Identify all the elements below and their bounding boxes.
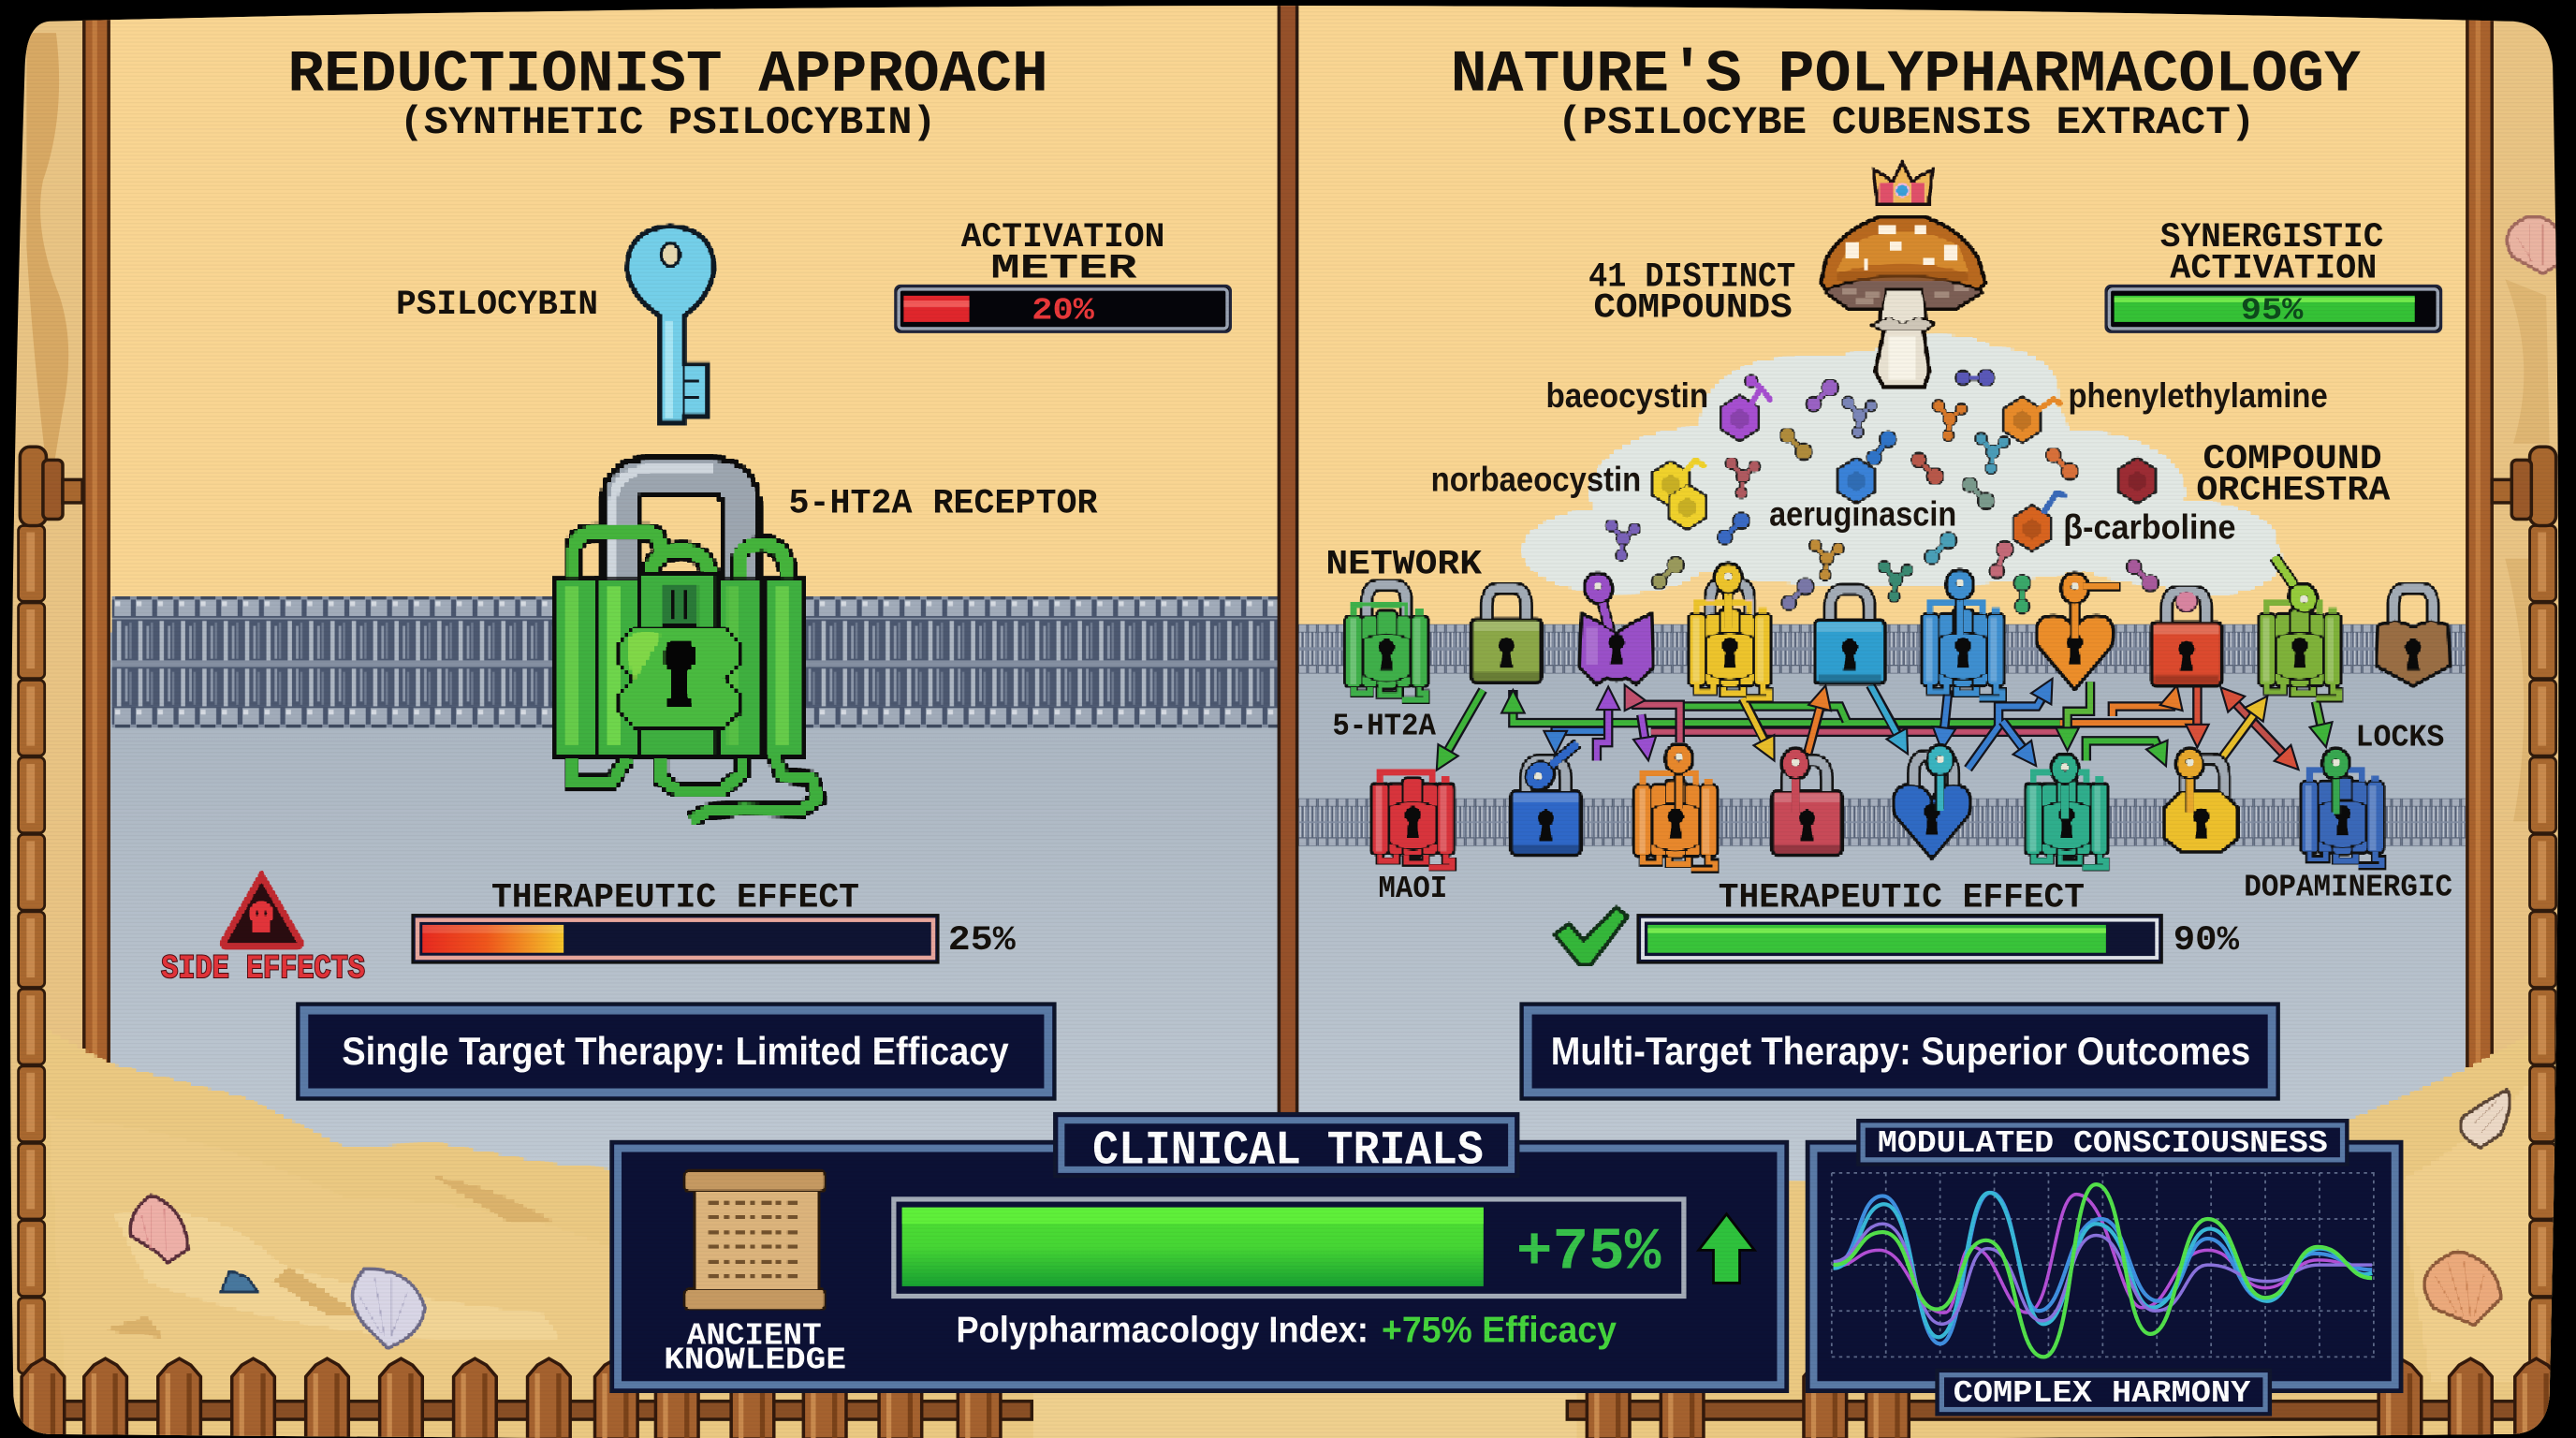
right lower membrane [1298, 799, 2466, 846]
wave chart: brain waves [1834, 1184, 2372, 1357]
therapeutic effect label right: THERAPEUTIC EFFECT [1719, 879, 2085, 918]
big green receptor lock [555, 468, 818, 820]
sand foreground [17, 1019, 2563, 1438]
locks row: upper membrane receptors [1345, 550, 2450, 700]
mushroom [1822, 217, 1984, 386]
label: dopaminergic: DOPAMINERGIC [2244, 870, 2452, 905]
label: compound orchestra [2196, 440, 2391, 510]
label: ancient knowledge [664, 1318, 846, 1379]
label: 41 distinct compounds: 41 DISTINCT [1588, 257, 1795, 297]
activation meter bar 20% [896, 286, 1231, 331]
central divider post [1278, 0, 1298, 1134]
summary box right: Multi-Target Therapy: Superior Outcomes [1551, 1029, 2250, 1073]
summary box right [1521, 1004, 2278, 1099]
title: reductionist approach: REDUCTIONIST APPROACH [287, 41, 1048, 109]
bottom picket fence [22, 1358, 2557, 1438]
label: locks: LOCKS [2356, 721, 2444, 756]
tab: modulated consciousness: MODULATED CONSCIOUSNESS [1878, 1126, 2328, 1162]
polypharmacology index caption [957, 1311, 1617, 1351]
label: 41 distinct compounds [1588, 257, 1795, 329]
panel: modulated consciousness [1807, 1121, 2402, 1415]
clinical trials heading tab: CLINICAL TRIALS [1092, 1124, 1484, 1178]
polypharmacology index caption: Polypharmacology Index: [957, 1311, 1368, 1351]
therapeutic effect bar right 90% [1638, 915, 2162, 962]
activation meter bar 20%: 20% [1032, 293, 1095, 329]
synergistic activation label: SYNERGISTIC [2160, 218, 2383, 257]
label: compound orchestra: ORCHESTRA [2196, 471, 2391, 510]
compound labels: baeocystin [1545, 376, 1708, 415]
compound cloud [1523, 335, 2282, 594]
bar: +75% polypharmacology: +75% [1516, 1219, 1661, 1286]
label: 41 distinct compounds: COMPOUNDS [1593, 289, 1793, 329]
network arrows [1442, 682, 2322, 769]
synergistic bar 95%: 95% [2241, 293, 2305, 329]
activation meter label: ACTIVATION [961, 218, 1164, 257]
wooden post right [2466, 17, 2494, 1068]
title: nature's polypharmacology: NATURE'S POLYPHARMACOLOGY [1451, 41, 2361, 109]
side effects label: SIDE EFFECTS [161, 950, 365, 988]
compound labels: β-carboline [2063, 508, 2235, 547]
therapeutic effect label left: THERAPEUTIC EFFECT [491, 879, 859, 918]
shell: lilac scallop [354, 1269, 424, 1347]
icon: green check [1556, 908, 1626, 964]
label: MAOI: MAOI [1379, 872, 1447, 907]
label: psilocybin: PSILOCYBIN [396, 286, 598, 325]
side fence left [19, 447, 82, 1373]
right upper membrane [1298, 624, 2466, 673]
crown [1874, 164, 1932, 204]
shell: pink top right [2508, 217, 2560, 272]
tab: complex harmony: COMPLEX HARMONY [1954, 1376, 2250, 1412]
subtitle: psilocybe cubensis extract: (PSILOCYBE CUBENSIS EXTRACT) [1558, 100, 2256, 145]
background: upper panel wall [110, 0, 2466, 633]
locks row: lower membrane receptors [1371, 734, 2383, 869]
subtitle: synthetic psilocybin: (SYNTHETIC PSILOCYBIN) [400, 100, 936, 145]
label: 5-HT2A receptor: 5-HT2A RECEPTOR [789, 484, 1098, 523]
icon: side-effects warning triangle [223, 875, 300, 946]
wave chart grid [1832, 1173, 2378, 1357]
label: compound orchestra: COMPOUND [2203, 440, 2382, 479]
panel: clinical trials [611, 1114, 1787, 1391]
activation meter label [961, 218, 1164, 289]
synergistic activation label [2160, 218, 2383, 289]
shell: peach lower right [2425, 1252, 2500, 1324]
compound labels: aeruginascin [1769, 495, 1956, 534]
compound labels [1431, 376, 2328, 547]
icon: up arrow [1699, 1214, 1754, 1283]
wooden post left [82, 17, 110, 1068]
value 90%: 90% [2174, 921, 2240, 961]
shell: lower right curled [2462, 1091, 2509, 1147]
activation meter label: METER [990, 250, 1138, 289]
value 25%: 25% [948, 921, 1017, 961]
label: network: NETWORK [1325, 545, 1483, 584]
therapeutic effect bar left 25% [413, 915, 938, 962]
molecules: compound orchestra [1606, 357, 2158, 616]
label: ancient knowledge: ANCIENT [687, 1318, 822, 1354]
shell: small blue [222, 1271, 256, 1291]
background: lower panel floor [110, 633, 2466, 1191]
summary box left [298, 1004, 1055, 1099]
shell: pink left [131, 1196, 187, 1262]
icon: cyan key [628, 227, 713, 422]
label: 5-HT2A: 5-HT2A [1332, 709, 1436, 744]
tab: complex harmony [1937, 1370, 2270, 1415]
synergistic activation label: ACTIVATION [2170, 250, 2377, 289]
side fence right [2492, 447, 2556, 1373]
bar: +75% polypharmacology [894, 1199, 1684, 1296]
summary box left: Single Target Therapy: Limited Efficacy [342, 1029, 1009, 1073]
left membrane [112, 596, 1278, 727]
polypharmacology index caption: +75% Efficacy [1382, 1311, 1617, 1351]
icon: ancient scroll [685, 1171, 825, 1310]
label: ancient knowledge: KNOWLEDGE [664, 1343, 846, 1379]
compound labels: norbaeocystin [1431, 461, 1641, 499]
compound labels: phenylethylamine [2068, 376, 2328, 415]
synergistic bar 95% [2106, 286, 2441, 331]
